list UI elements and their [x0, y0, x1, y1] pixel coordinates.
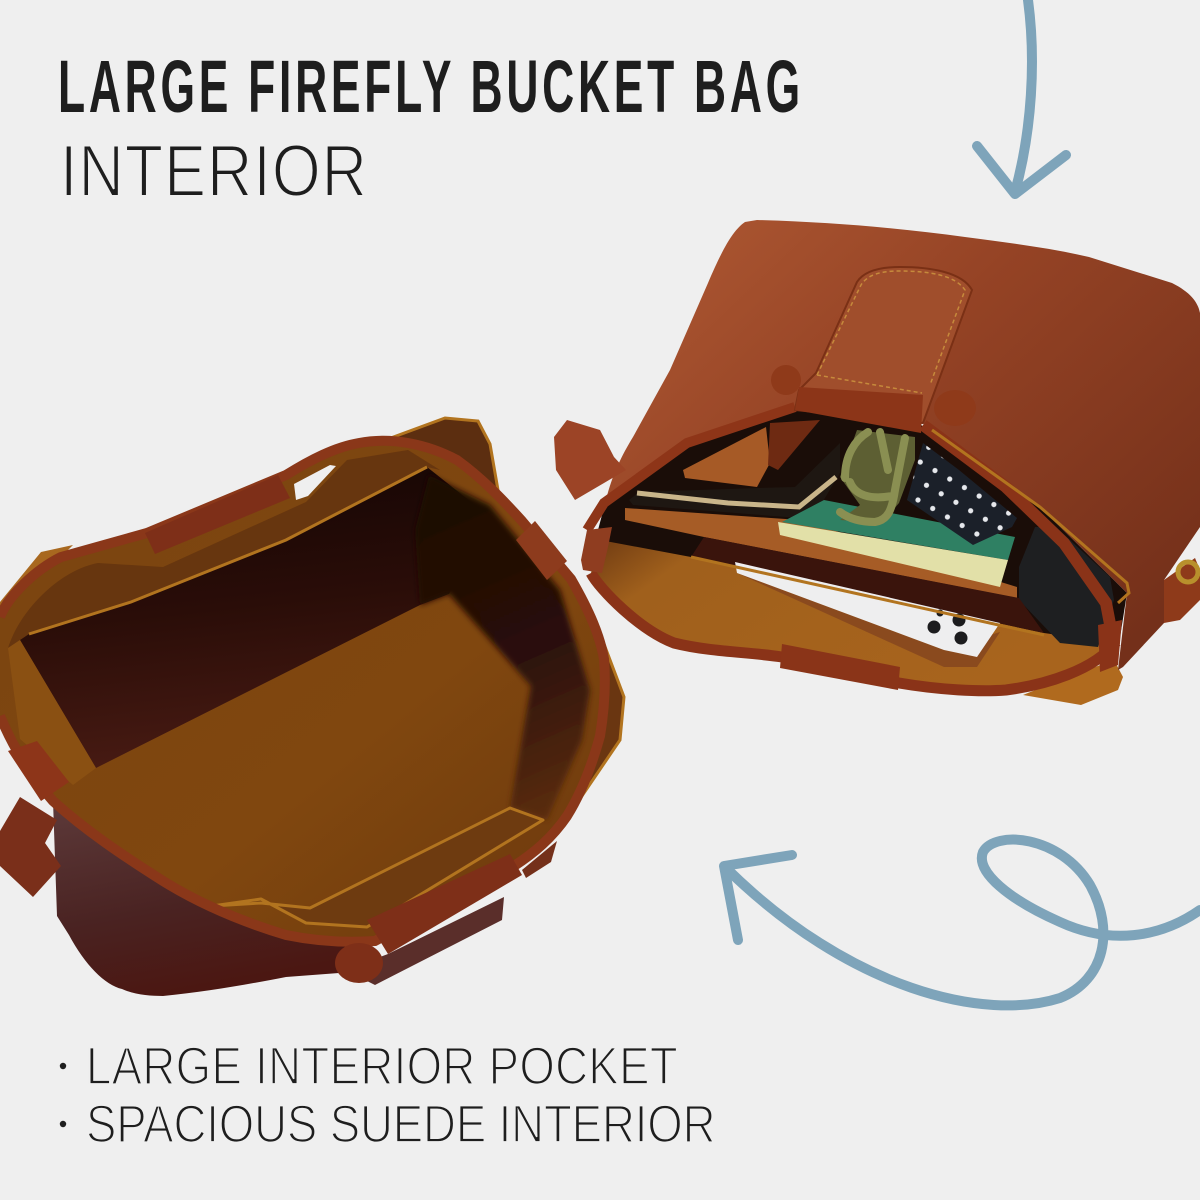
back wall pocket: [20, 467, 490, 768]
gap behind handle: [294, 465, 336, 500]
zipper: [637, 477, 836, 507]
rim left tab: [581, 527, 612, 573]
suede interior: [591, 540, 1114, 691]
front suede flap: [212, 808, 543, 927]
contents: orange notebook: [625, 508, 1017, 598]
small right knot: [522, 841, 557, 878]
bullet list: [60, 1037, 716, 1154]
brass hardware: [1178, 562, 1198, 582]
contents: green cord: [840, 430, 915, 523]
rim right: [923, 425, 1114, 645]
contents: brown pouch: [683, 427, 770, 487]
left handle tab: [8, 741, 69, 801]
back suede flap outside rim: [388, 418, 498, 490]
outer leather underside: [53, 801, 375, 996]
left knot: [771, 365, 801, 395]
outer leather: [606, 220, 1200, 670]
bottom knot: [335, 943, 383, 983]
lower left strap: [0, 797, 61, 897]
bag: filled bag with contents: [554, 220, 1200, 705]
bag: open empty bag showing suede interior: [0, 418, 624, 996]
strap stitching: [817, 271, 965, 393]
right knot: [934, 390, 976, 426]
title: LARGE FIREFLY BUCKET BAG: [58, 45, 800, 128]
contents: red pouch: [768, 420, 820, 470]
pocket yellow edge: [29, 467, 427, 634]
contents: polka dot scarf: [907, 443, 1017, 545]
strap tab: [795, 267, 972, 423]
back suede panel: [8, 450, 440, 648]
left outer edge: [0, 545, 73, 617]
subtitle: INTERIOR: [60, 131, 367, 212]
rim lower: [591, 573, 1116, 691]
front suede flap outside: [1023, 660, 1123, 705]
bullet: spacious suede interior: SPACIOUS SUEDE INTERIOR: [86, 1095, 716, 1154]
contents: black device: [1019, 527, 1114, 647]
opening dark interior: [590, 407, 1127, 650]
rim: [0, 441, 605, 942]
phone: [735, 562, 1000, 657]
rim right tab: [1098, 620, 1122, 672]
arrow: bottom right looping: [724, 840, 1200, 1005]
bottom plate: [345, 897, 504, 985]
bottom handle tab: [367, 854, 522, 954]
right inner wall: [415, 475, 590, 820]
contents: green book cover: [782, 500, 1015, 560]
right suede flap outside rim: [571, 644, 624, 812]
arrow: top right curving down: [977, 0, 1066, 194]
interior base shape: [0, 441, 605, 942]
bottom tab: [780, 644, 900, 690]
pocket edge: [691, 557, 1044, 635]
rim upper: [587, 407, 795, 530]
right handle tab: [516, 521, 567, 580]
contents: book pages: [778, 522, 1008, 587]
inner pocket: [691, 537, 1044, 633]
left suede strip: [8, 640, 96, 785]
bullet: large interior pocket: LARGE INTERIOR POCKET: [86, 1037, 678, 1096]
right strap: [1164, 558, 1200, 623]
phone case: [737, 573, 1000, 667]
top handle tab: [145, 475, 290, 554]
strap base: [795, 387, 923, 433]
contents: zipper pouch: [629, 443, 840, 518]
yellow edge right: [932, 430, 1129, 603]
left loop strap: [554, 420, 626, 500]
